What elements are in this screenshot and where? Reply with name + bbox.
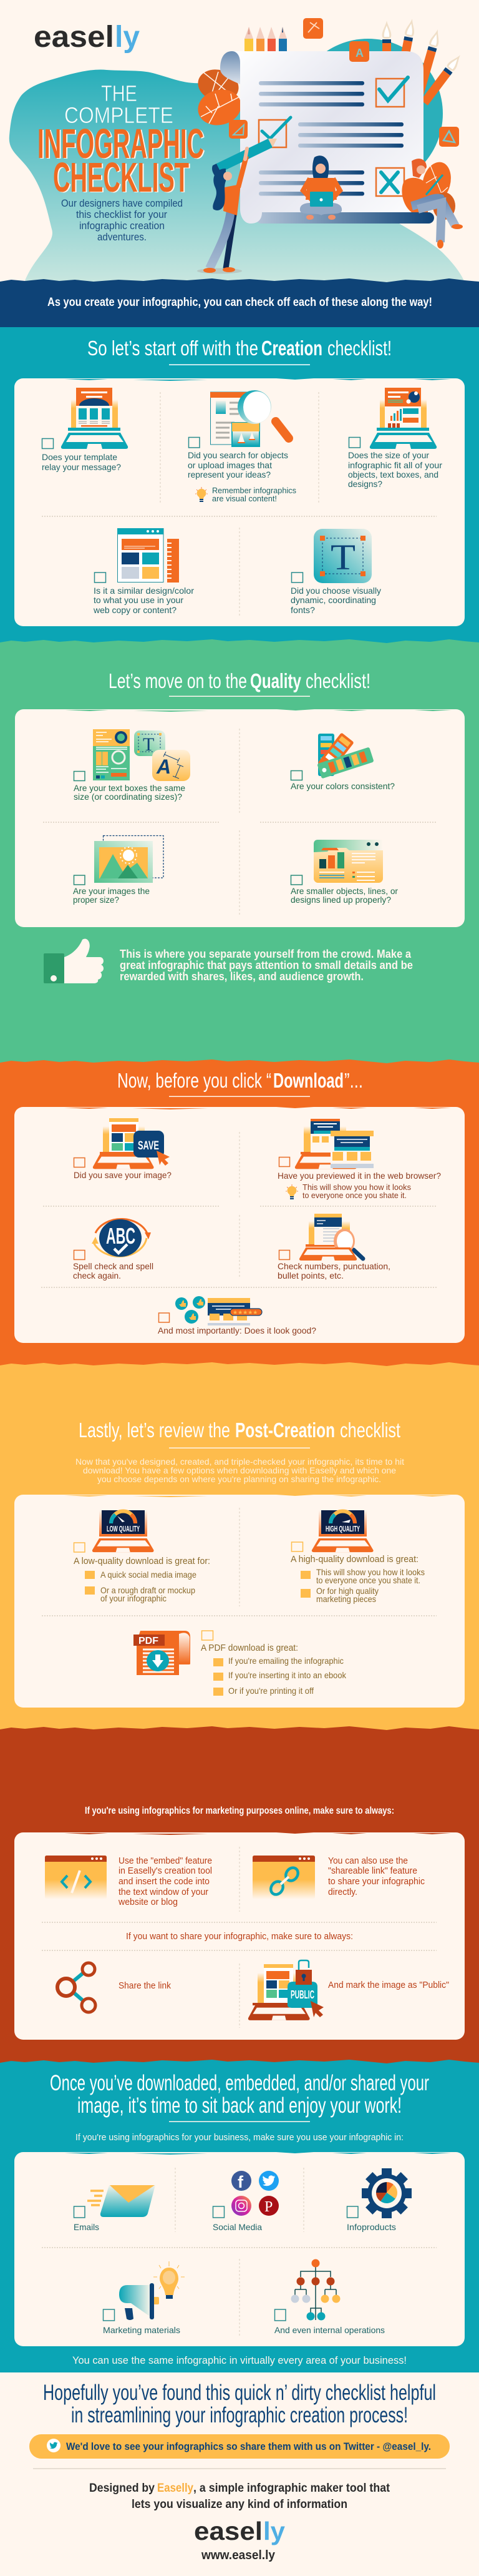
text: Infoproducts — [347, 2222, 396, 2232]
intro text: If you're using infographics for marketing purposes online, make sure to always: — [85, 1806, 394, 1816]
checked box two — [259, 117, 291, 147]
title: THE — [101, 81, 137, 106]
text: Does your template — [42, 452, 117, 462]
item: looks good — [158, 1296, 316, 1335]
text: fonts? — [291, 605, 315, 615]
checkbox — [74, 1250, 85, 1260]
intro text: Our designers have compiled — [61, 197, 183, 209]
heading — [50, 2071, 429, 2118]
heading: Quality — [250, 669, 301, 692]
text: directly. — [328, 1887, 357, 1897]
text: dynamic, coordinating — [291, 595, 376, 605]
item: alignment — [291, 840, 398, 905]
item: images — [73, 835, 163, 905]
icon: social media logos — [231, 2171, 279, 2216]
text: relay your message? — [42, 462, 121, 472]
text: Social Media — [213, 2222, 262, 2232]
icon: PDF document: PDF — [138, 1636, 158, 1646]
text: A high-quality download is great: — [291, 1554, 419, 1565]
orange leaves — [194, 65, 245, 130]
text: Have you previewed it in the web browser? — [278, 1171, 441, 1181]
heading: checklist! — [327, 337, 392, 360]
top scroll roll — [220, 51, 240, 84]
text: Are your text boxes the same — [74, 783, 185, 793]
icon badge: text — [349, 41, 369, 62]
text — [118, 1856, 212, 1907]
checkbox — [292, 1542, 303, 1551]
heading: Post-Creation — [235, 1418, 335, 1442]
icon: web page and ruler — [117, 528, 179, 583]
callout text: great infographic that pays attention to small details and be — [120, 959, 413, 971]
text: check again. — [73, 1271, 121, 1281]
text: infographic fit all of your — [348, 460, 442, 470]
item: colors — [291, 732, 395, 791]
closing line: You can use the same infographic in virtually every area of your business! — [72, 2354, 407, 2366]
text: Spell check and spell — [73, 1261, 153, 1271]
icon: folder window — [314, 840, 383, 883]
item: fonts — [291, 529, 381, 615]
text — [74, 783, 185, 802]
item: low quality — [74, 1510, 210, 1603]
text: Is it a similar design/color — [94, 586, 194, 596]
section: creation checklist — [0, 327, 479, 643]
big teal pencil — [212, 139, 277, 175]
text: Check numbers, punctuation, — [278, 1261, 390, 1271]
heading: So let’s start off with the — [87, 337, 258, 360]
icon badge: text: A — [356, 47, 364, 59]
icon badge: pen — [303, 18, 323, 39]
item: check numbers — [278, 1214, 390, 1281]
text: bullet points, etc. — [278, 1271, 344, 1281]
icon: high quality laptop — [312, 1510, 374, 1552]
text: and insert the code into — [119, 1876, 210, 1887]
text: You can also use the — [328, 1856, 408, 1866]
item: size — [348, 388, 442, 489]
text: A PDF download is great: — [201, 1643, 298, 1653]
intro text: infographic creation — [79, 220, 165, 232]
icon: laptop with save button: SAVE — [138, 1139, 159, 1153]
heading: Creation — [261, 337, 322, 360]
item: share link — [57, 1963, 171, 2012]
icon: T text box: T — [331, 537, 356, 578]
text — [93, 586, 194, 615]
closing heading — [43, 2381, 436, 2427]
text: to share your infographic — [328, 1876, 425, 1887]
text: size (or coordinating sizes)? — [74, 792, 182, 802]
callout text: This is where you separate yourself from the crowd. Make a — [120, 948, 412, 960]
checkbox — [213, 2206, 225, 2218]
bullets: Or a rough draft or mockup — [100, 1585, 195, 1595]
tip: are visual content! — [212, 494, 277, 503]
teal circle behind document — [293, 39, 443, 189]
icon: share nodes — [57, 1963, 95, 2012]
icon: thumbs and rating — [175, 1296, 262, 1325]
text: Use the "embed" feature — [119, 1856, 212, 1866]
seated man with leaves — [402, 159, 463, 248]
easelly logo: easel — [34, 21, 114, 54]
twitter callout — [29, 2434, 450, 2459]
checkbox — [74, 875, 85, 885]
icon: embed window — [45, 1856, 107, 1899]
bottom scroll roll — [256, 212, 434, 224]
section: enjoy your work — [0, 2060, 479, 2372]
icon: poster and font tiles: T — [143, 734, 154, 755]
item: embed — [45, 1856, 212, 1907]
checkbox — [292, 573, 303, 583]
section: embed and share — [0, 1726, 479, 2065]
heading — [79, 1418, 400, 1442]
panel — [14, 1107, 465, 1343]
icon: org chart — [291, 2259, 341, 2320]
checkbox — [74, 1543, 85, 1552]
text: Did you search for objects — [188, 450, 288, 460]
section: post-creation checklist — [0, 1362, 479, 1731]
tip: This will show you how it looks — [302, 1182, 411, 1192]
checkbox — [202, 1631, 213, 1640]
easelly logo: ly — [115, 21, 140, 54]
item: similar design — [93, 528, 194, 615]
title: CHECKLIST — [54, 155, 190, 202]
bullets: If you're emailing the infographic — [228, 1656, 344, 1666]
text: in Easelly's creation tool — [119, 1866, 212, 1876]
icon: low quality laptop: LOW QUALITY — [107, 1524, 140, 1533]
divider text: If you want to share your infographic, make sure to always: — [126, 1931, 353, 1942]
item: search objects — [188, 383, 296, 503]
text: designs? — [348, 479, 382, 489]
icon: resized image — [94, 835, 163, 883]
checkbox — [279, 1250, 289, 1260]
intro text — [75, 1457, 404, 1484]
text — [348, 450, 442, 489]
text: designs lined up properly? — [291, 895, 391, 905]
text: Are your colors consistent? — [291, 781, 395, 791]
text: represent your ideas? — [188, 469, 271, 479]
text: to what you use in your — [94, 595, 183, 605]
text: Did you save your image? — [74, 1170, 172, 1180]
bullets: Or for high quality — [316, 1586, 379, 1596]
intro text: this checklist for your — [76, 209, 167, 220]
title: CHECKLIST — [53, 154, 189, 201]
bullets: of your infographic — [100, 1593, 167, 1603]
tip — [195, 486, 296, 503]
icon: megaphone and bulb — [119, 2261, 185, 2320]
checkbox — [279, 1158, 289, 1166]
checkbox — [74, 1158, 85, 1168]
bullets: If you're inserting it into an ebook — [228, 1670, 347, 1680]
checkbox — [347, 2206, 358, 2218]
item: social media — [213, 2171, 279, 2232]
hero section — [9, 18, 465, 282]
tip — [286, 1182, 411, 1200]
item: public — [248, 1960, 449, 2020]
tip: to everyone once you shate it. — [302, 1191, 407, 1200]
text: or upload images that — [188, 460, 272, 470]
paint brushes — [382, 18, 464, 106]
icon: twitter — [47, 2439, 60, 2452]
bullets: This will show you how it looks — [316, 1567, 425, 1577]
footer section — [0, 2372, 479, 2576]
checkbox — [42, 438, 54, 448]
icon: laptop with save button — [93, 1118, 170, 1169]
section: quality checklist — [0, 639, 479, 1064]
checkbox — [349, 437, 360, 448]
checkbox — [274, 2309, 286, 2321]
icon: link window — [253, 1856, 315, 1899]
text: Share the link — [119, 1980, 171, 1991]
item: pdf — [133, 1631, 347, 1696]
heading: Let’s move on to the — [109, 669, 247, 692]
text — [278, 1261, 390, 1281]
heading: checklist! — [306, 669, 370, 692]
icon: social media logos: f — [238, 2173, 244, 2191]
text: Marketing materials — [103, 2325, 180, 2335]
icon: magnifier over document — [210, 383, 289, 447]
icon: social media logos: P — [264, 2199, 273, 2215]
icon: T text box — [314, 529, 372, 583]
callout text: rewarded with shares, likes, and audience growth. — [120, 970, 364, 983]
seated woman with laptop — [300, 155, 342, 220]
item: shareable link — [253, 1856, 425, 1899]
checkbox — [291, 770, 302, 780]
icon badge: triangle — [229, 120, 248, 139]
item: template — [42, 388, 128, 472]
panel — [14, 1832, 465, 2040]
callout: stand out — [44, 939, 413, 983]
text — [188, 450, 288, 479]
bullets: Or if you're printing it off — [228, 1686, 314, 1696]
text: Did you choose visually — [291, 586, 381, 596]
item: infoproducts — [347, 2168, 412, 2232]
credit text: lets you visualize any kind of information — [132, 2498, 347, 2511]
panel — [14, 2152, 465, 2346]
panel — [14, 1495, 465, 1708]
credit text: Easelly — [157, 2482, 193, 2495]
text — [42, 452, 121, 472]
item: high quality — [291, 1510, 425, 1604]
bullets — [85, 1570, 196, 1603]
navy banner — [0, 278, 479, 327]
text: And even internal operations — [274, 2325, 385, 2335]
item: emails — [74, 2185, 155, 2232]
text — [291, 586, 381, 615]
text: proper size? — [73, 895, 119, 905]
row lines — [259, 81, 404, 196]
text — [73, 886, 150, 905]
item: text boxes — [74, 729, 190, 802]
intro text — [61, 197, 183, 243]
website: www.easel.ly — [201, 2549, 276, 2562]
title: INFOGRAPHIC — [39, 121, 205, 168]
panel — [15, 709, 465, 927]
text: And mark the image as "Public" — [328, 1980, 449, 1990]
text: "shareable link" feature — [328, 1866, 417, 1876]
checkbox — [158, 1313, 170, 1322]
intro text: download! You have a few options when downloading with Easelly and which one — [83, 1465, 396, 1475]
heading: ”... — [344, 1069, 363, 1092]
text: objects, text boxes, and — [348, 469, 438, 479]
intro text: If you're using infographics for your business, make sure you use your infographic in: — [75, 2132, 404, 2143]
icon: laptop with template — [61, 388, 128, 449]
icon: thumbs up — [44, 939, 104, 983]
intro text: adventures. — [97, 231, 147, 243]
panel — [14, 378, 465, 626]
title: INFOGRAPHIC — [37, 120, 204, 167]
crossed box — [376, 168, 404, 196]
checkbox — [104, 2309, 115, 2321]
intro text: you choose depends on where you're planning on sharing the infographic. — [97, 1474, 381, 1484]
checkbox — [74, 772, 85, 780]
standing woman — [197, 149, 247, 273]
text: Emails — [74, 2222, 99, 2232]
checked box one — [376, 77, 408, 107]
heading: Now, before you click “ — [117, 1069, 271, 1092]
bullets: A quick social media image — [100, 1570, 196, 1580]
text: the text window of your — [119, 1887, 208, 1897]
credit text: , a simple infographic maker tool that — [193, 2482, 390, 2495]
text — [291, 886, 398, 905]
item: internal operations — [274, 2259, 385, 2335]
item: save — [74, 1118, 172, 1180]
text: website or blog — [118, 1897, 178, 1907]
text — [328, 1856, 425, 1897]
icon: poster and font tiles: A — [156, 755, 171, 778]
icon: PDF document — [133, 1631, 190, 1675]
teal blob background — [9, 70, 465, 282]
easelly logo: ly — [263, 2517, 285, 2545]
icon: laptop with public lock: PUBLIC — [291, 1989, 314, 2001]
icon: colour swatches — [317, 732, 374, 779]
text: web copy or content? — [93, 605, 177, 615]
icon: gear with pie chart — [362, 2168, 412, 2218]
icon: thumbs and rating: ★★★★★ — [233, 1310, 258, 1316]
icon: laptop with browser pages — [295, 1119, 374, 1169]
heading: Lastly, let’s review the — [79, 1418, 230, 1442]
twitter callout: We'd love to see your infographics so share them with us on Twitter - @easel_ly. — [66, 2441, 431, 2452]
intro text: Now that you've designed, created, and triple-checked your infographic, its time to hit — [75, 1457, 404, 1467]
bullets — [213, 1656, 347, 1696]
credit text: Designed by — [89, 2482, 155, 2495]
title — [37, 81, 205, 202]
icon: flying envelope — [87, 2185, 155, 2217]
text: Are your images the — [73, 886, 150, 896]
heading: checklist — [340, 1418, 400, 1442]
text: And most importantly: Does it look good? — [158, 1325, 316, 1335]
pencils — [244, 27, 287, 52]
bullets — [301, 1567, 425, 1604]
callout text — [120, 948, 413, 983]
easelly logo: easel — [194, 2517, 263, 2545]
heading: Download — [273, 1069, 344, 1092]
icon: high quality laptop: HIGH QUALITY — [326, 1524, 360, 1533]
item: preview — [278, 1119, 441, 1200]
icon: low quality laptop — [92, 1510, 154, 1552]
title: COMPLETE — [64, 102, 173, 128]
bullets: marketing pieces — [316, 1594, 376, 1604]
text — [73, 1261, 153, 1281]
icon: poster and font tiles — [93, 729, 190, 781]
section: before download — [0, 1059, 479, 1367]
credit text — [89, 2482, 390, 2511]
icon: laptop with infographic — [370, 388, 437, 449]
icon: laptop with magnifier — [299, 1214, 363, 1261]
text: Does the size of your — [348, 450, 429, 460]
text: A low-quality download is great for: — [74, 1556, 210, 1566]
text: Are smaller objects, lines, or — [291, 886, 398, 896]
checkbox — [291, 875, 302, 885]
checkbox — [74, 2206, 85, 2218]
checklist document — [232, 51, 423, 224]
icon badge: vector — [439, 127, 459, 147]
bullets: to everyone once you shate it. — [316, 1575, 420, 1585]
item: spell check — [73, 1219, 153, 1281]
icon: ABC badge: ABC — [106, 1223, 135, 1249]
item: marketing materials — [103, 2261, 185, 2335]
tip: Remember infographics — [212, 486, 296, 495]
icon: laptop with public lock — [248, 1960, 324, 2020]
checkbox — [95, 573, 106, 583]
checkbox — [188, 437, 200, 448]
